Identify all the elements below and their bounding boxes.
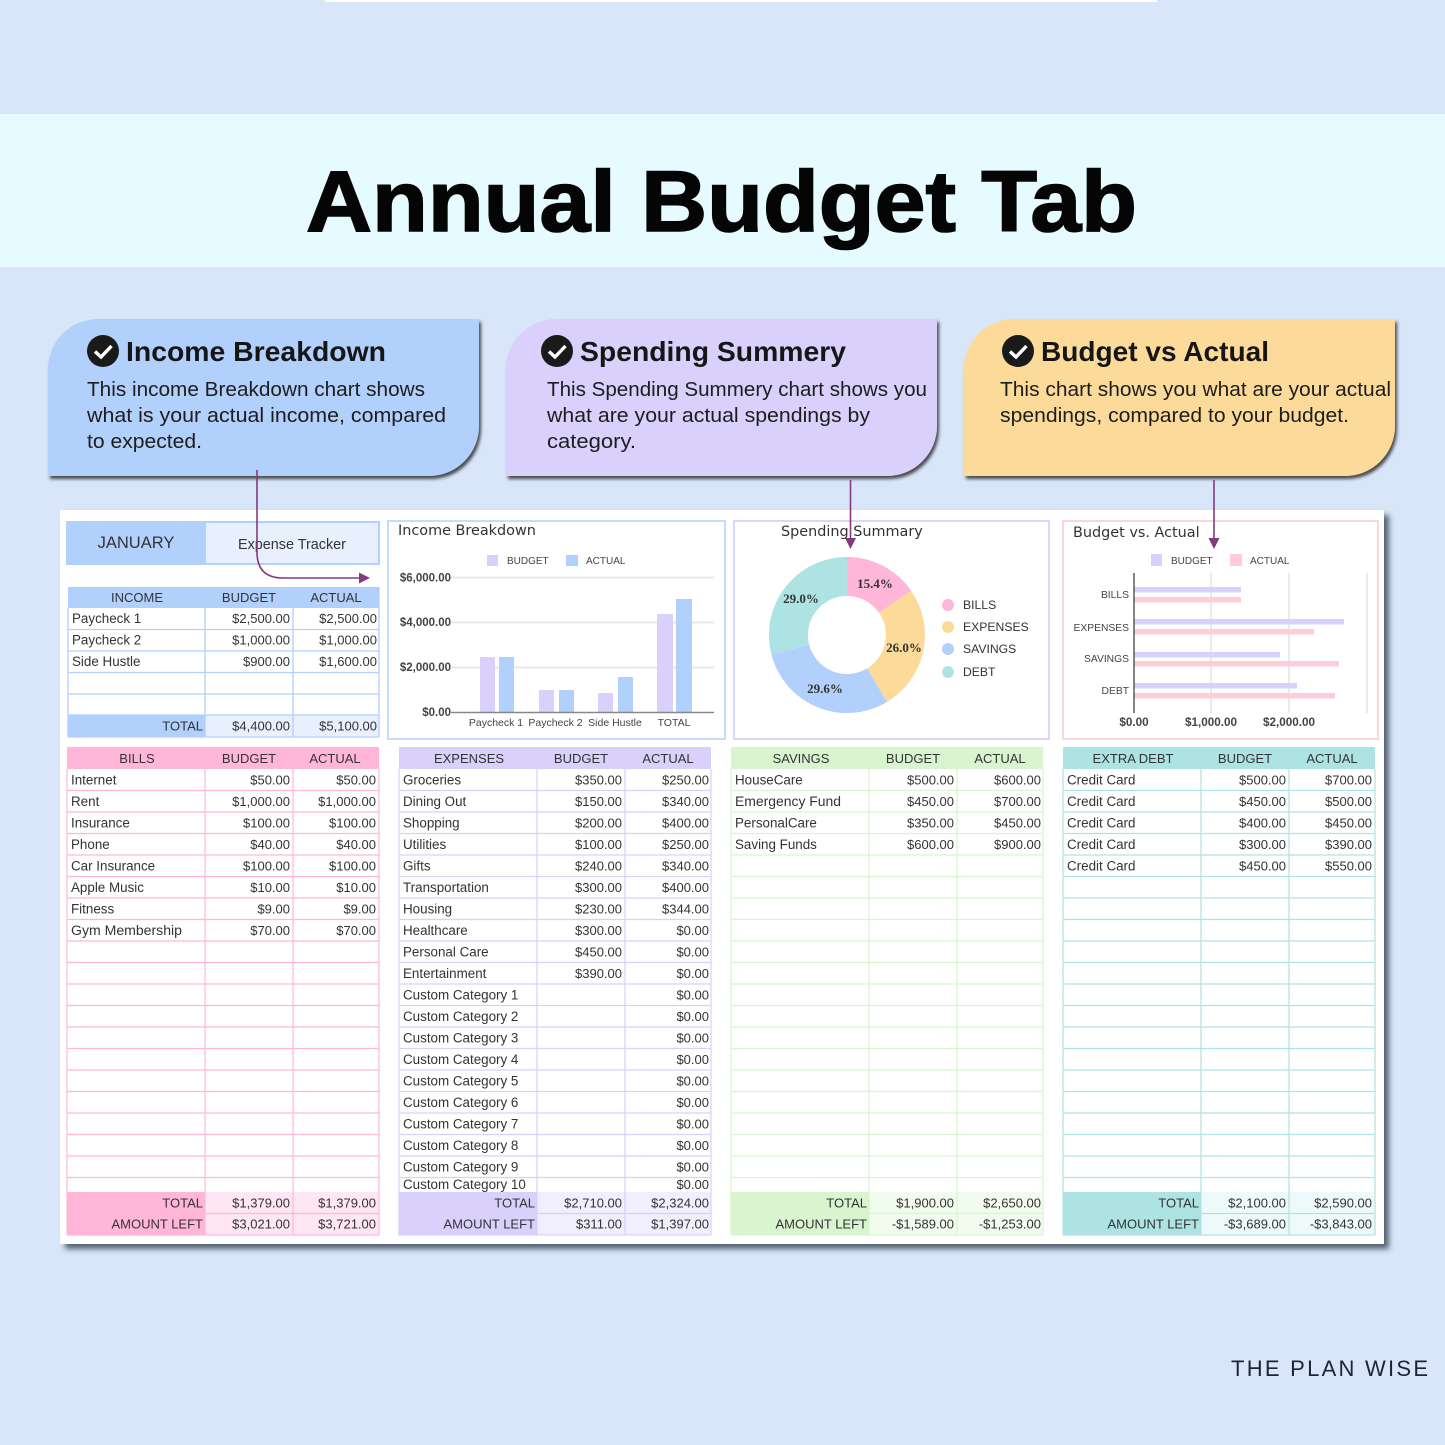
table: bills: TOTAL <box>162 1196 203 1210</box>
table: income <box>68 587 379 737</box>
donut <box>769 557 925 713</box>
month header: Expense Tracker <box>238 537 346 553</box>
table: bills: $10.00 <box>336 880 376 895</box>
table: savings: $600.00 <box>994 772 1041 788</box>
table: extra debt: ACTUAL <box>1306 751 1358 766</box>
table: savings: $500.00 <box>907 772 954 788</box>
callout text: what is your actual income, compared <box>86 405 446 427</box>
table: expenses: $0.00 <box>676 966 709 981</box>
table: expenses: $311.00 <box>576 1216 622 1232</box>
table: expenses: $250.00 <box>662 837 709 852</box>
arrow: budget callout to chart <box>1208 480 1220 549</box>
table: bills: $3,721.00 <box>318 1216 376 1232</box>
table: expenses: $340.00 <box>662 858 709 874</box>
table: income: Side Hustle <box>72 654 140 669</box>
chart legend <box>487 555 626 567</box>
table: savings: PersonalCare <box>735 816 817 830</box>
table: expenses: Custom Category 1 <box>403 988 518 1002</box>
table: bills: Insurance <box>71 816 130 830</box>
table: expenses: AMOUNT LEFT <box>444 1216 535 1232</box>
chart: income breakdown: TOTAL <box>658 717 691 729</box>
table: bills: BUDGET <box>222 751 276 766</box>
table: extra debt: Credit Card <box>1067 772 1135 788</box>
callout text <box>1000 379 1391 427</box>
donut: 29.0% <box>783 591 819 606</box>
table: expenses: $0.00 <box>676 1116 709 1132</box>
table: bills: $100.00 <box>329 816 376 830</box>
chart: income breakdown: Income Breakdown <box>398 523 536 539</box>
table: expenses: Groceries <box>403 772 461 788</box>
table: extra debt: Credit Card <box>1067 816 1135 830</box>
table: expenses: $0.00 <box>676 1030 709 1046</box>
table: bills <box>67 747 379 1235</box>
table: expenses: Custom Category 8 <box>403 1138 518 1153</box>
table: savings: $450.00 <box>994 816 1041 830</box>
chart: spending summary donut <box>734 521 1049 739</box>
table: expenses: $0.00 <box>676 1009 709 1024</box>
callout: Spending Summery <box>506 319 937 476</box>
table: extra debt: BUDGET <box>1218 751 1272 766</box>
table: bills: ACTUAL <box>309 751 361 766</box>
table: expenses: Healthcare <box>403 923 468 938</box>
table: income: $1,000.00 <box>319 632 377 648</box>
table: bills: $3,021.00 <box>232 1216 290 1232</box>
table: expenses: $390.00 <box>575 966 622 981</box>
chart legend <box>1151 554 1290 567</box>
table: bills: $40.00 <box>336 837 376 852</box>
table: extra debt: -$3,689.00 <box>1224 1216 1286 1232</box>
table: expenses: Custom Category 6 <box>403 1095 518 1110</box>
table: bills: $1,000.00 <box>318 794 376 809</box>
table: bills: $70.00 <box>250 923 290 938</box>
chart: budget vs actual: DEBT <box>1102 686 1130 697</box>
table: extra debt: -$3,843.00 <box>1310 1216 1372 1232</box>
title: Annual Budget Tab <box>306 154 1137 250</box>
table: income: TOTAL <box>162 718 203 734</box>
table: expenses: $0.00 <box>676 923 709 938</box>
table: extra debt: Credit Card <box>1067 794 1135 809</box>
table: extra debt: Credit Card <box>1067 837 1135 852</box>
table: savings: SAVINGS <box>773 751 830 766</box>
table: extra debt: $390.00 <box>1325 837 1372 852</box>
table: bills: Fitness <box>71 902 114 916</box>
table: expenses: Custom Category 10 <box>403 1177 526 1192</box>
table: expenses: Custom Category 2 <box>403 1009 518 1024</box>
callout text: to expected. <box>87 431 202 453</box>
table: expenses: Custom Category 9 <box>403 1160 518 1174</box>
table: expenses: $100.00 <box>575 837 622 852</box>
table: expenses: $0.00 <box>676 1074 709 1088</box>
table: bills: $100.00 <box>329 858 376 874</box>
icon: check badge <box>1002 335 1034 367</box>
table: expenses: $0.00 <box>676 1177 709 1192</box>
table: expenses: Gifts <box>403 858 431 874</box>
table: income: ACTUAL <box>310 590 362 605</box>
table: bills: Gym Membership <box>71 923 182 938</box>
table: expenses: $0.00 <box>676 1095 709 1110</box>
donut: 29.6% <box>807 681 843 696</box>
table: savings: -$1,589.00 <box>892 1216 954 1232</box>
table: savings: $600.00 <box>907 837 954 852</box>
table: income: Paycheck 2 <box>72 632 141 648</box>
callout: Income Breakdown <box>48 319 479 476</box>
chart: budget vs actual: Budget vs. Actual <box>1073 525 1200 541</box>
chart: income breakdown: $4,000.00 <box>400 617 451 629</box>
table: extra debt: $700.00 <box>1325 772 1372 788</box>
table: expenses: ACTUAL <box>642 751 694 766</box>
chart legend: BUDGET <box>507 556 549 567</box>
table: bills: $100.00 <box>243 816 290 830</box>
bars <box>1134 587 1344 698</box>
donut: 26.0% <box>886 640 922 655</box>
donut legend: DEBT <box>963 665 996 679</box>
table: expenses: Custom Category 5 <box>403 1074 518 1088</box>
donut legend: BILLS <box>963 598 996 612</box>
table: expenses: Shopping <box>403 816 460 830</box>
table: extra debt: $450.00 <box>1239 858 1286 874</box>
table: bills: $9.00 <box>257 902 290 916</box>
table: savings: TOTAL <box>826 1196 867 1210</box>
chart: budget vs actual: $0.00 <box>1119 716 1149 729</box>
chart legend: BUDGET <box>1171 556 1213 567</box>
table: expenses: $450.00 <box>575 944 622 960</box>
table: bills: Car Insurance <box>71 858 155 874</box>
table: expenses: $350.00 <box>575 772 622 788</box>
table: income: $5,100.00 <box>319 718 377 734</box>
brand footer: THE PLAN WISE <box>1231 1356 1428 1381</box>
table: expenses: $300.00 <box>575 880 622 895</box>
icon: check badge <box>87 335 119 367</box>
donut: 15.4% <box>857 576 893 591</box>
table: savings: $900.00 <box>994 837 1041 852</box>
table: expenses: $400.00 <box>662 816 709 830</box>
arrow: spending callout to donut <box>845 480 856 549</box>
callout text <box>86 379 446 453</box>
chart: budget vs actual <box>1063 521 1378 739</box>
table: expenses: $0.00 <box>676 1052 709 1067</box>
table: expenses: $300.00 <box>575 923 622 938</box>
chart: income breakdown: Paycheck 1 <box>469 717 523 729</box>
table: expenses: $340.00 <box>662 794 709 809</box>
table: expenses: $230.00 <box>575 902 622 916</box>
chart: income breakdown <box>388 521 725 739</box>
callout heading: Income Breakdown <box>126 336 386 367</box>
table: extra debt: AMOUNT LEFT <box>1108 1216 1199 1232</box>
table: bills: BILLS <box>119 751 155 766</box>
table: income: $1,600.00 <box>319 654 377 669</box>
table: expenses <box>399 747 711 1235</box>
table: expenses: $344.00 <box>662 902 709 916</box>
donut legend: EXPENSES <box>963 620 1029 634</box>
table: extra debt: $2,590.00 <box>1314 1196 1372 1210</box>
table: bills: $40.00 <box>250 837 290 852</box>
table: savings: $700.00 <box>994 794 1041 809</box>
table: expenses: $0.00 <box>676 988 709 1002</box>
callout text: what are your actual spendings by <box>546 405 870 427</box>
callout text <box>546 379 927 453</box>
table: bills: Apple Music <box>71 880 144 895</box>
table: savings: $1,900.00 <box>896 1196 954 1210</box>
table: savings: $2,650.00 <box>983 1196 1041 1210</box>
chart legend: ACTUAL <box>1250 556 1290 567</box>
chart: income breakdown: Side Hustle <box>588 717 642 729</box>
table: extra debt: $2,100.00 <box>1228 1196 1286 1210</box>
chart: income breakdown: Paycheck 2 <box>528 717 583 729</box>
icon: check badge <box>541 335 573 367</box>
table: expenses: $200.00 <box>575 816 622 830</box>
table: expenses: $0.00 <box>676 1160 709 1174</box>
table: expenses: $240.00 <box>575 858 622 874</box>
table: expenses: $150.00 <box>575 794 622 809</box>
chart: income breakdown: $0.00 <box>422 707 451 719</box>
table: bills: $1,379.00 <box>232 1196 290 1210</box>
table: bills: $50.00 <box>336 772 376 788</box>
table: extra debt: $550.00 <box>1325 858 1372 874</box>
table: income: BUDGET <box>222 590 276 605</box>
table: savings: $350.00 <box>907 816 954 830</box>
title banner <box>0 114 1445 267</box>
month header <box>66 521 380 565</box>
chart: budget vs actual: SAVINGS <box>1084 654 1129 665</box>
table: savings: Emergency Fund <box>735 794 841 809</box>
table: income: $4,400.00 <box>232 718 290 734</box>
table: expenses: $2,710.00 <box>564 1196 622 1210</box>
table: savings <box>731 747 1043 1235</box>
table: savings: Saving Funds <box>735 837 817 852</box>
table: extra debt: $300.00 <box>1239 837 1286 852</box>
chart: budget vs actual: $2,000.00 <box>1263 716 1315 729</box>
table: income: $900.00 <box>243 654 290 669</box>
table: savings: -$1,253.00 <box>979 1216 1041 1232</box>
table: expenses: Custom Category 3 <box>403 1030 518 1046</box>
table: expenses: $0.00 <box>676 1138 709 1153</box>
callout heading: Spending Summery <box>580 336 846 367</box>
table: expenses: $2,324.00 <box>651 1196 709 1210</box>
table: income: $1,000.00 <box>232 632 290 648</box>
table: extra debt: TOTAL <box>1158 1196 1199 1210</box>
table: bills: $1,379.00 <box>318 1196 376 1210</box>
table: expenses: $0.00 <box>676 944 709 960</box>
table: expenses: Custom Category 4 <box>403 1052 519 1067</box>
table: expenses: BUDGET <box>554 751 608 766</box>
callout text: spendings, compared to your budget. <box>1000 405 1349 427</box>
table: extra debt <box>1063 747 1375 1235</box>
table: bills: $1,000.00 <box>232 794 290 809</box>
table: extra debt: Credit Card <box>1067 858 1135 874</box>
chart: budget vs actual: EXPENSES <box>1073 623 1129 634</box>
table: expenses: $250.00 <box>662 772 709 788</box>
chart: income breakdown: $6,000.00 <box>400 572 451 584</box>
table: bills: $9.00 <box>343 902 376 916</box>
table: expenses: TOTAL <box>494 1196 535 1210</box>
table: bills: Phone <box>71 837 110 852</box>
chart: spending summary donut: Spending Summary <box>781 524 923 540</box>
spreadsheet panel <box>60 510 1384 1244</box>
table: savings: ACTUAL <box>974 751 1026 766</box>
table: bills: AMOUNT LEFT <box>112 1216 203 1232</box>
chart: income breakdown: $2,000.00 <box>400 662 451 674</box>
table: expenses: Housing <box>403 902 452 916</box>
table: income: INCOME <box>111 590 163 605</box>
callout text: This income Breakdown chart shows <box>87 379 425 401</box>
bars <box>480 599 692 712</box>
table: extra debt: $450.00 <box>1325 816 1372 830</box>
callout text: This Spending Summery chart shows you <box>547 379 927 401</box>
table: expenses: EXPENSES <box>434 751 504 766</box>
callout text: category. <box>547 431 636 453</box>
table: savings: $450.00 <box>907 794 954 809</box>
table: expenses: $400.00 <box>662 880 709 895</box>
month header: JANUARY <box>98 534 174 552</box>
table: extra debt: $400.00 <box>1239 816 1286 830</box>
chart: budget vs actual: BILLS <box>1101 590 1129 601</box>
table: income: $2,500.00 <box>232 611 290 626</box>
table: bills: Internet <box>71 772 117 788</box>
table: bills: $100.00 <box>243 858 290 874</box>
table: expenses: Dining Out <box>403 794 467 809</box>
callout: Budget vs Actual <box>964 319 1395 476</box>
table: extra debt: $500.00 <box>1239 772 1286 788</box>
callout heading: Budget vs Actual <box>1041 336 1269 367</box>
table: expenses: Transportation <box>403 880 489 895</box>
table: expenses: $1,397.00 <box>651 1216 709 1232</box>
table: expenses: Entertainment <box>403 966 487 981</box>
table: extra debt: $500.00 <box>1325 794 1372 809</box>
table: savings: BUDGET <box>886 751 940 766</box>
table: extra debt: EXTRA DEBT <box>1093 751 1174 766</box>
chart: budget vs actual: $1,000.00 <box>1185 716 1237 729</box>
table: income: Paycheck 1 <box>72 611 141 626</box>
table: income: $2,500.00 <box>319 611 377 626</box>
donut legend <box>942 598 1029 679</box>
table: bills: $50.00 <box>250 772 290 788</box>
donut legend: SAVINGS <box>963 642 1016 656</box>
table: bills: Rent <box>71 794 100 809</box>
table: extra debt: $450.00 <box>1239 794 1286 809</box>
arrow: income callout to chart <box>257 470 370 584</box>
table: expenses: Utilities <box>403 837 446 852</box>
table: savings: AMOUNT LEFT <box>776 1216 867 1232</box>
callout text: This chart shows you what are your actual <box>1000 379 1391 401</box>
table: savings: HouseCare <box>735 772 803 788</box>
chart legend: ACTUAL <box>586 556 626 567</box>
table: bills: $70.00 <box>336 923 376 938</box>
table: expenses: Custom Category 7 <box>403 1116 518 1132</box>
table: expenses: Personal Care <box>403 944 489 960</box>
table: bills: $10.00 <box>250 880 290 895</box>
